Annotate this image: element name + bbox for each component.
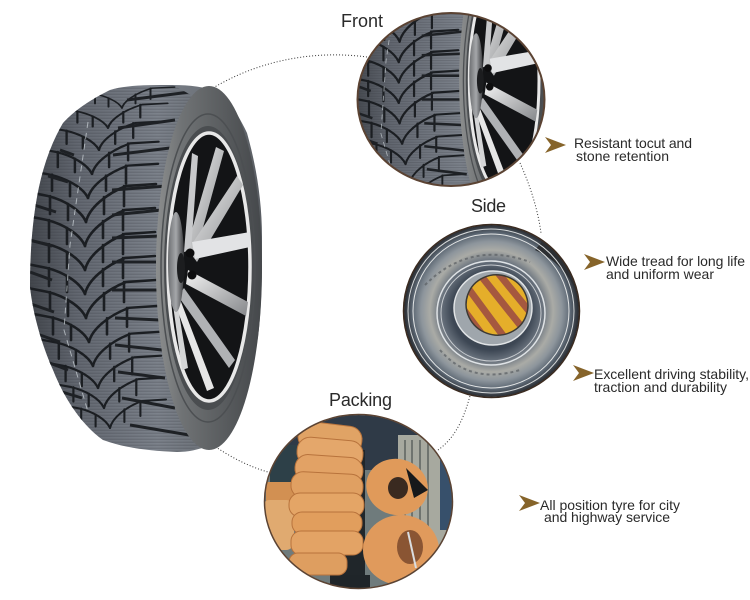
heading: Side: Side (471, 196, 506, 216)
caption: wide tread: Wide tread for long life (606, 253, 745, 269)
caption: stability: Excellent driving stability, (594, 366, 749, 382)
arrow: side caption 1 (584, 254, 605, 270)
caption: stability: traction and durability (594, 379, 727, 395)
caption: packing: and highway service (544, 509, 670, 525)
circle: side view of tyre (402, 224, 580, 398)
caption: wide tread: and uniform wear (606, 266, 714, 282)
caption: packing: All position tyre for city (540, 497, 680, 513)
arrow: front caption (545, 137, 566, 153)
caption: front: Resistant tocut and (574, 135, 692, 151)
heading: Packing: Packing (329, 390, 392, 410)
arrow: side caption 2 (573, 365, 594, 381)
circle: packed tyres (262, 412, 458, 592)
heading: Front: Front (341, 11, 383, 31)
caption: front: stone retention (576, 148, 669, 164)
dotted connector lines (213, 55, 541, 472)
circle: front view of tread and rim (356, 12, 546, 187)
arrow: packing caption (519, 495, 540, 511)
main tyre image (25, 80, 262, 460)
